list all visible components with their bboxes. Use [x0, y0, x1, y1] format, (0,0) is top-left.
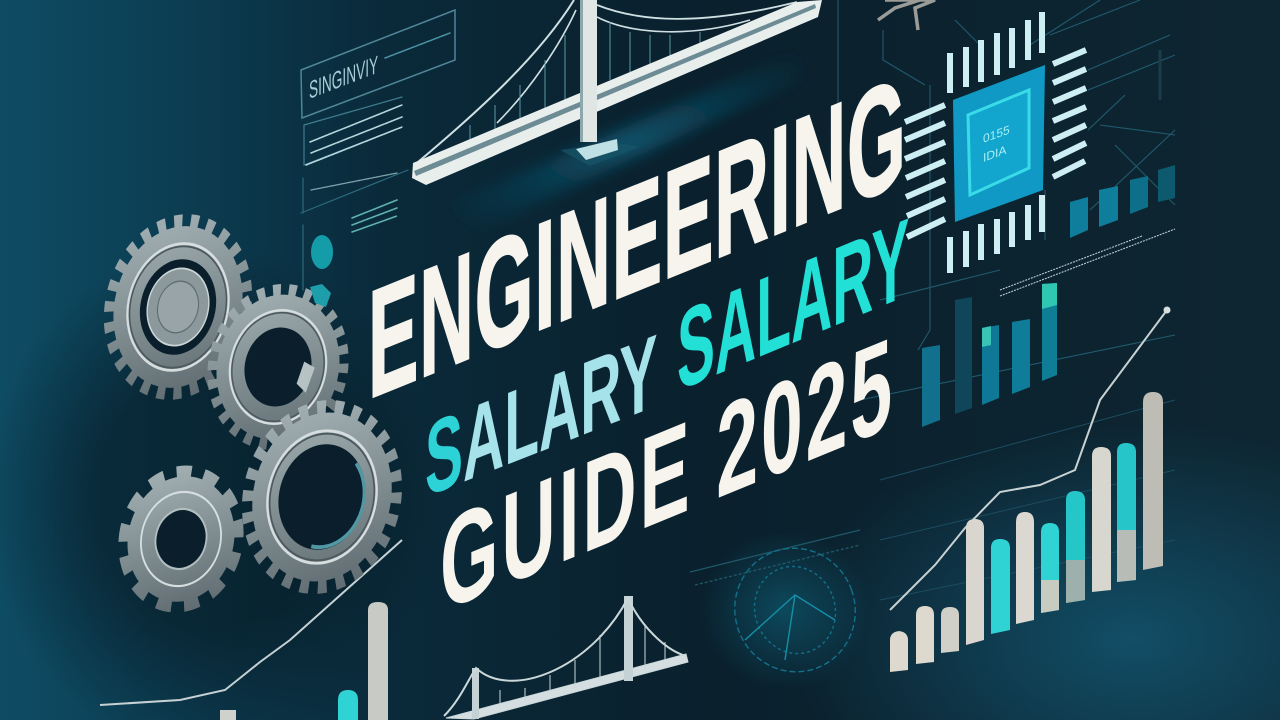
title: Salary Salary: SALARY [677, 195, 909, 416]
title: Salary Salary: SALARY [425, 313, 657, 520]
illustration: globe diagram [690, 530, 873, 690]
title: Salary Salary [425, 195, 909, 520]
background glow bottom right [790, 410, 1280, 720]
line and bar chart: lower right [880, 306, 1175, 672]
chip label: IDIA [983, 143, 1007, 165]
icon: teal dot [311, 235, 333, 269]
title: Engineering: ENGINEERING [368, 43, 907, 431]
bar chart: upper right small [1070, 165, 1175, 238]
panel: document with heading [301, 10, 455, 290]
glow band under bridge [450, 50, 800, 230]
panel: circuit lines right [838, 0, 1175, 400]
chip label: 0155 [983, 123, 1010, 146]
icon: gear lower left [111, 461, 251, 617]
title: Guide 2025: GUIDE 2025 [440, 308, 895, 640]
icon: gear lower right [231, 393, 413, 601]
document heading: SINGINVIY [309, 52, 378, 105]
icon: microchip [905, 12, 1086, 273]
illustration: line chart bottom left [100, 540, 402, 720]
illustration: small mechanical part top [878, 0, 935, 30]
illustration: suspension bridge bottom [444, 596, 688, 719]
bar chart: middle [922, 283, 1057, 427]
illustration: suspension bridge top [412, 0, 822, 185]
icon: gear middle [198, 278, 358, 456]
icon: gear top left [93, 208, 263, 406]
chip label [983, 123, 1010, 165]
gear drop shadow [0, 230, 440, 720]
icon: teal gear tooth [310, 284, 331, 307]
